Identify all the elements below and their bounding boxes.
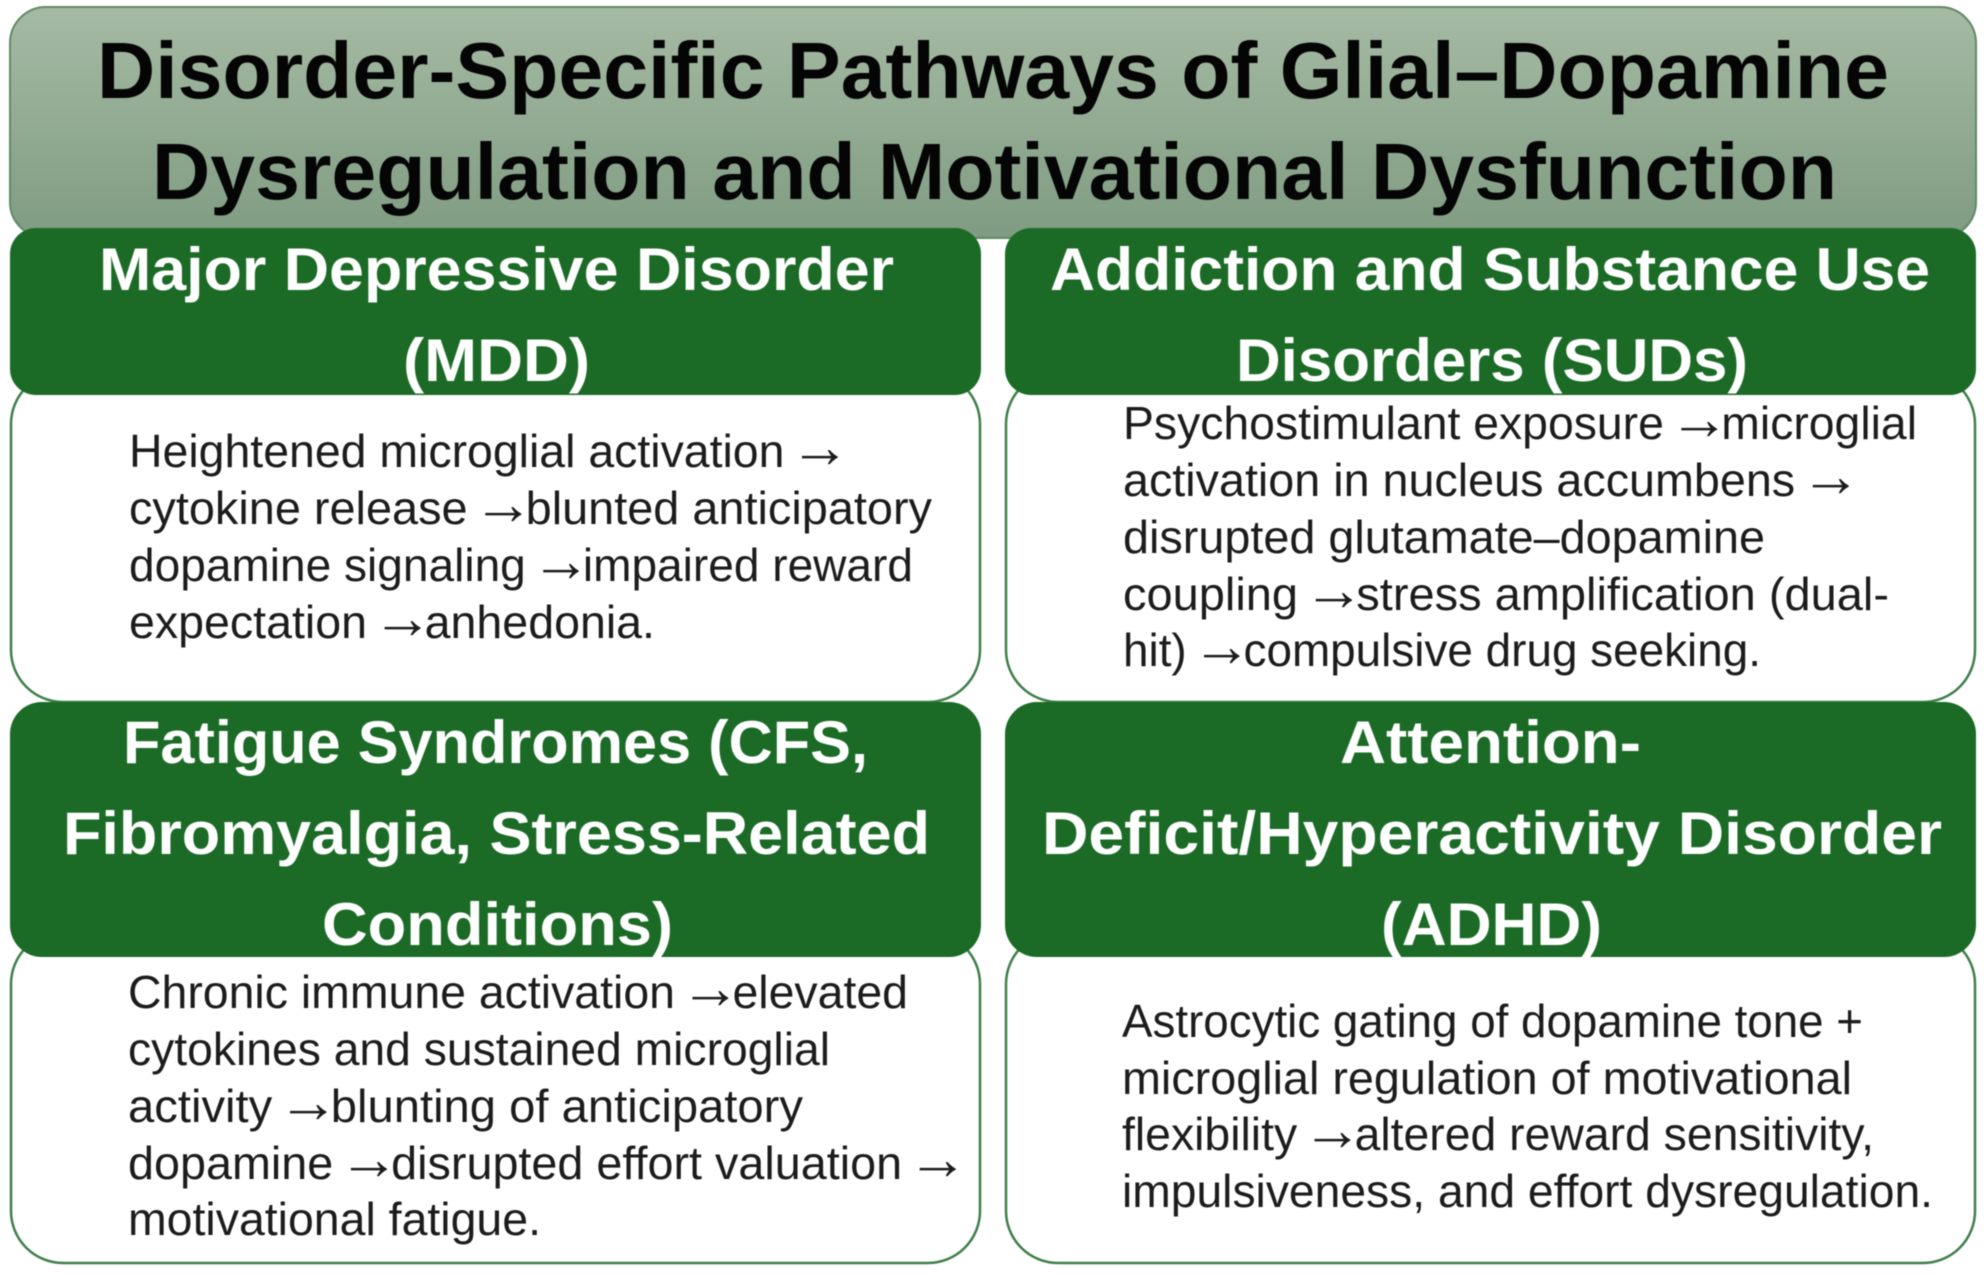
title banner [10,7,1976,238]
SUD pathway text: coupling →stress amplification (dual- [1123,556,1889,623]
fatigue header: Fatigue Syndromes (CFS, [123,709,868,776]
SUD pathway text: disrupted glutamate–dopamine [1123,511,1765,563]
ADHD pathway text [1122,995,1933,1217]
fatigue header [10,702,981,958]
MDD pathway text: Heightened microglial activation → [129,413,842,480]
SUD pathway text [1123,385,1917,679]
ADHD header: Deficit/Hyperactivity Disorder [1042,800,1942,867]
SUD header [1005,228,1976,395]
fatigue pathway text: Chronic immune activation →elevated [128,954,908,1021]
SUD pathway text: Psychostimulant exposure →microglial [1123,385,1917,452]
MDD header: Major Depressive Disorder [99,236,894,303]
ADHD header: Attention- [1340,709,1641,776]
MDD pathway text: cytokine release →blunted anticipatory [129,470,932,537]
SUD body box [1006,372,1975,702]
MDD pathway text: dopamine signaling →impaired reward [129,527,913,594]
SUD header: Disorders (SUDs) [1236,327,1748,394]
panel: major depressive disorder [10,228,981,702]
title banner: Disorder-Specific Pathways of Glial–Dopamine [97,26,1889,115]
SUD pathway text: hit) →compulsive drug seeking. [1123,612,1761,679]
SUD pathway text: activation in nucleus accumbens → [1123,442,1853,509]
MDD header [10,228,981,395]
ADHD header: (ADHD) [1381,891,1602,958]
MDD pathway text [129,413,932,651]
fatigue pathway text: activity →blunting of anticipatory [128,1068,803,1135]
ADHD body box [1006,932,1975,1263]
title banner: Dysregulation and Motivational Dysfunction [152,127,1837,216]
fatigue pathway text: cytokines and sustained microglial [128,1023,830,1075]
MDD body box [11,372,980,702]
ADHD pathway text: flexibility →altered reward sensitivity, [1122,1096,1874,1163]
ADHD pathway text: impulsiveness, and effort dysregulation. [1122,1165,1933,1217]
SUD header: Addiction and Substance Use [1050,236,1930,303]
ADHD header [1005,702,1976,958]
fatigue pathway text [128,954,960,1245]
panel: ADHD [1005,702,1976,1263]
MDD header: (MDD) [403,327,590,394]
MDD pathway text: expectation →anhedonia. [129,584,655,651]
ADHD pathway text: Astrocytic gating of dopamine tone + [1122,995,1863,1047]
panel: addiction and substance use disorders [1005,228,1976,702]
fatigue pathway text: motivational fatigue. [128,1193,541,1245]
panel: fatigue syndromes [10,702,981,1263]
fatigue header: Conditions) [322,891,673,958]
fatigue pathway text: dopamine →disrupted effort valuation → [128,1125,960,1192]
fatigue body box [11,932,980,1263]
fatigue header: Fibromyalgia, Stress-Related [63,800,930,867]
ADHD pathway text: microglial regulation of motivational [1122,1052,1852,1104]
